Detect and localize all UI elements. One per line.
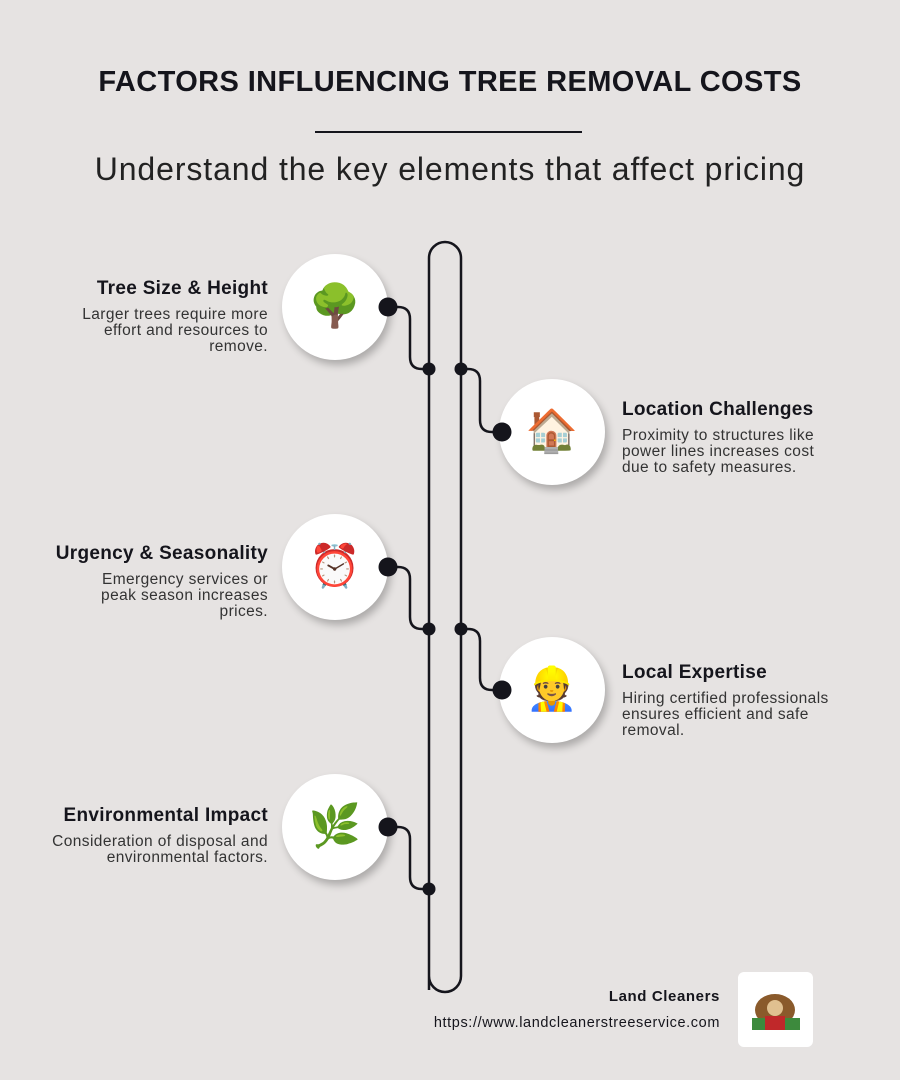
title: FACTORS INFLUENCING TREE REMOVAL COSTS <box>98 66 802 98</box>
text: location: Proximity to structures like power lines increases cost due to safety measures. <box>622 427 814 476</box>
icon: house <box>499 379 605 485</box>
icon: worker <box>499 637 605 743</box>
text: urgency: Emergency services or peak season increases prices. <box>101 571 268 620</box>
brand <box>434 988 720 1031</box>
brand: Land Cleaners <box>609 988 720 1005</box>
icon: tree: 🌳 <box>309 282 361 331</box>
text: expertise: Local Expertise <box>622 662 767 683</box>
icon: alarm clock <box>282 514 388 620</box>
icon: house: 🏠 <box>526 407 578 456</box>
logo <box>738 972 813 1047</box>
text: tree size: Tree Size & Height <box>97 278 268 299</box>
icon: herb <box>282 774 388 880</box>
text: environmental: Environmental Impact <box>64 805 268 826</box>
icon: tree <box>282 254 388 360</box>
text: location: Location Challenges <box>622 399 814 420</box>
text: urgency: Urgency & Seasonality <box>56 543 268 564</box>
text: environmental: Consideration of disposal and environmental factors. <box>52 833 268 866</box>
subtitle: Understand the key elements that affect pricing <box>95 151 805 187</box>
text: tree size: Larger trees require more effort and resources to remove. <box>82 306 268 355</box>
icon: herb: 🌿 <box>309 802 361 851</box>
text: urgency <box>56 543 268 620</box>
icon: worker: 👷 <box>526 665 578 714</box>
text: environmental <box>52 805 268 866</box>
brand: https://www.landcleanerstreeservice.com <box>434 1015 720 1031</box>
text: expertise <box>622 662 829 739</box>
text: expertise: Hiring certified professionals ensures efficient and safe removal. <box>622 690 829 739</box>
text: tree size <box>82 278 268 355</box>
text: location <box>622 399 814 476</box>
icon: alarm clock: ⏰ <box>309 542 361 591</box>
